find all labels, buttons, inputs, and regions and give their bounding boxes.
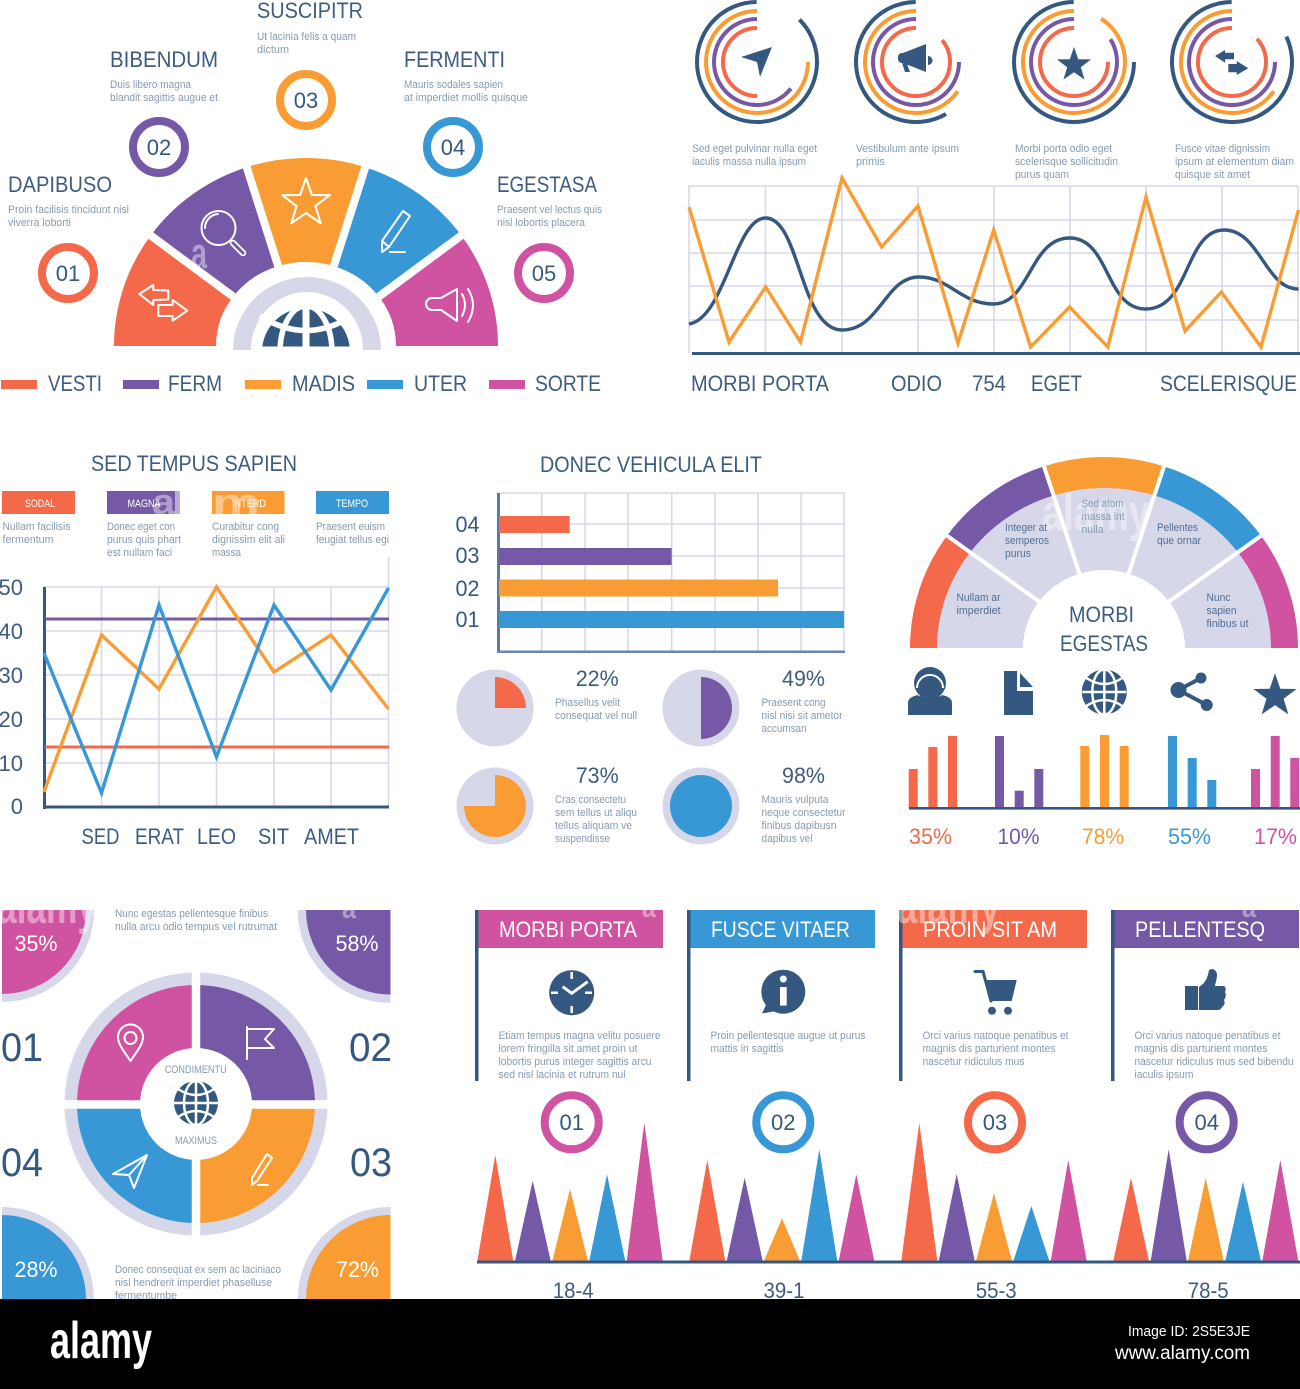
legend: VESTI xyxy=(48,371,102,396)
card 1: MORBI PORTA xyxy=(499,917,637,942)
icon: speaker xyxy=(426,289,473,322)
icon: thumbs up xyxy=(1185,969,1226,1010)
semicircle gauge xyxy=(910,457,1298,650)
line chart xyxy=(689,178,1300,355)
card 4: magnis dis parturient montes xyxy=(1134,1043,1268,1055)
column: sodal xyxy=(2,491,75,546)
column: tempo: feugiat tellus egi xyxy=(316,534,389,546)
center labels and globe: CONDIMENTU xyxy=(165,1064,227,1076)
caption 2: Vestibulum ante ipsum xyxy=(856,143,959,155)
navy curve xyxy=(689,218,1298,330)
corner: 35%: 35% xyxy=(14,931,58,956)
corner: 72%: 72% xyxy=(336,1257,379,1282)
card 3: Orci varius natoque penatibus et xyxy=(922,1030,1068,1042)
legend: SORTE xyxy=(535,371,601,396)
gauge labels: Nunc xyxy=(1206,592,1231,604)
column: magna: est nullam faci xyxy=(107,547,172,559)
text block: Bibendum: Duis libero magna xyxy=(110,79,192,91)
gauge center title: MORBI xyxy=(1069,602,1134,627)
column: interd xyxy=(212,481,285,559)
x axis labels: MORBI PORTA xyxy=(691,371,829,396)
gauge center title xyxy=(1060,602,1148,656)
text block: Dapibuso: DAPIBUSO xyxy=(8,172,112,197)
corner: 28% xyxy=(2,1207,94,1299)
x axis labels: ERAT xyxy=(135,824,184,849)
caption 3: purus quam xyxy=(1015,169,1069,181)
pie 22% xyxy=(456,666,637,746)
icon: navigation arrow xyxy=(741,47,772,77)
triangle chart group 4 xyxy=(1113,1149,1298,1261)
numbered ring 04 xyxy=(427,121,479,173)
x axis labels: 754 xyxy=(972,371,1006,396)
text block: Egestasa: EGESTASA xyxy=(497,172,597,197)
caption 4: ipsum at elementum diam xyxy=(1175,156,1294,168)
percent labels: 78% xyxy=(1082,824,1124,849)
bar labels: 01 xyxy=(456,607,480,632)
bar labels: 02 xyxy=(456,576,480,601)
pie 73%: Cras consectetu xyxy=(555,794,626,806)
pie 22%: 22% xyxy=(576,666,619,691)
icon: globe xyxy=(258,309,350,346)
semicircle segment: magenta xyxy=(379,236,498,346)
icon: flag xyxy=(247,1027,274,1059)
numbered ring 05: 05 xyxy=(532,261,556,286)
column: tempo: Praesent euism xyxy=(316,521,385,533)
icon: pencil xyxy=(252,1154,272,1185)
footer url: www.alamy.com xyxy=(1114,1343,1250,1364)
semicircle gauge: alamy xyxy=(1042,484,1150,542)
caption 4: Fusce vitae dignissim xyxy=(1175,143,1270,155)
pie 49%: Praesent cong xyxy=(762,697,826,709)
range labels: 39-1 xyxy=(764,1278,804,1303)
card 2: Proin pellentesque augue ut purus xyxy=(710,1030,866,1042)
footer logo: alamy xyxy=(50,1312,152,1370)
quadrant numbers: 04 xyxy=(1,1141,43,1185)
top note xyxy=(115,908,277,933)
wheel xyxy=(62,970,330,1238)
text block: Suscipitr xyxy=(257,0,363,56)
card 4: PELLENTESQ xyxy=(1135,917,1265,942)
radial chart 4 xyxy=(1152,0,1300,142)
text block: Suscipitr: dictum xyxy=(257,44,289,56)
gauge labels: Integer at xyxy=(1005,522,1047,534)
text block: Dapibuso: Proin facilisis tincidunt nisl xyxy=(8,204,129,216)
card 3: magnis dis parturient montes xyxy=(922,1043,1056,1055)
column: sodal: SODAL xyxy=(25,498,55,510)
legend: FERM xyxy=(168,371,222,396)
bottom note: Donec consequat ex sem ac laciniaco xyxy=(115,1264,281,1276)
numbered ring 02 xyxy=(133,121,185,173)
semicircle segment: orange xyxy=(247,158,365,266)
caption 2 xyxy=(856,143,959,168)
caption 1 xyxy=(692,143,817,168)
column: magna: a xyxy=(152,481,176,522)
numbered ring 01 xyxy=(545,1095,599,1149)
gauge labels: purus xyxy=(1005,548,1031,560)
caption 3 xyxy=(1015,143,1118,181)
column: tempo xyxy=(316,491,389,546)
card 1: Etiam tempus magna velitu posuere xyxy=(498,1030,660,1042)
icon: star outline xyxy=(282,178,330,223)
pie 49%: accumsan xyxy=(762,723,806,735)
range labels xyxy=(553,1278,1229,1303)
numbered ring 04: 04 xyxy=(1194,1110,1219,1135)
percent labels: 35% xyxy=(909,824,952,849)
pie 22%: consequat vel null xyxy=(555,710,637,722)
caption 4: quisque sit amet xyxy=(1175,169,1250,181)
gauge labels: semperos xyxy=(1005,535,1049,547)
corner: 58% xyxy=(298,910,390,1003)
column: magna: Donec eget con xyxy=(107,521,175,533)
numbered ring 02: 02 xyxy=(771,1110,796,1135)
triangle chart axis xyxy=(477,1260,1300,1264)
x axis labels: AMET xyxy=(304,824,359,849)
card 1: lorem fringilla sit amet proin ut xyxy=(498,1043,638,1055)
x axis labels: SIT xyxy=(258,824,289,849)
quadrant numbers xyxy=(1,1026,392,1185)
text block: Fermenti: FERMENTI xyxy=(404,47,505,72)
column: magna: purus quis phart xyxy=(107,534,181,546)
column: sodal: fermentum xyxy=(2,534,54,546)
lavender arch xyxy=(233,277,381,350)
icon: magnifier xyxy=(202,211,243,253)
numbered ring 03 xyxy=(968,1095,1022,1149)
pie 73%: suspendisse xyxy=(555,833,610,845)
text block: Dapibuso xyxy=(8,172,129,229)
text block: Suscipitr: Ut lacinia felis a quam xyxy=(257,31,356,43)
icon: globe xyxy=(1082,670,1127,714)
panel: donec vehicula elit xyxy=(456,452,846,845)
pie 98%: finibus dapibusn xyxy=(762,820,836,832)
text block: Egestasa xyxy=(497,172,602,229)
footer image id: Image ID: 2S5E3JE xyxy=(1128,1323,1250,1340)
x axis labels xyxy=(82,824,359,849)
percent labels: 10% xyxy=(998,824,1040,849)
numbered ring 01: 01 xyxy=(56,261,80,286)
icon: exchange arrows xyxy=(139,285,187,321)
icon: info bubble xyxy=(761,970,805,1014)
semicircle segment: purple xyxy=(151,167,278,297)
corner: 58%: 58% xyxy=(336,931,378,956)
caption 3: Morbi porta odio eget xyxy=(1015,143,1112,155)
icon: paper plane xyxy=(113,1155,147,1188)
quadrant numbers: 01 xyxy=(1,1026,43,1070)
numbered ring 01 xyxy=(42,247,94,299)
column: tempo: TEMPO xyxy=(336,498,368,510)
gauge labels: nulla xyxy=(1082,524,1104,536)
text block: Egestasa: Praesent vel lectus quis xyxy=(497,204,602,216)
horizontal bar chart xyxy=(497,493,845,653)
column: interd: INTERD xyxy=(232,498,266,510)
range labels: 55-3 xyxy=(976,1278,1017,1303)
radial chart 3 xyxy=(1004,0,1144,132)
pie 98%: dapibus vel xyxy=(762,833,812,845)
corner: 28%: 28% xyxy=(14,1257,58,1282)
column: magna: MAGNA xyxy=(128,498,161,510)
pie 73%: sem tellus ut aliqu xyxy=(555,807,637,819)
gauge labels: sapien xyxy=(1206,605,1236,617)
column: magna xyxy=(107,481,181,559)
gauge labels xyxy=(956,498,1248,630)
pie 49%: 49% xyxy=(782,666,825,691)
bar chart xyxy=(909,735,1300,810)
card 1: a xyxy=(642,891,656,924)
pie 49% xyxy=(662,666,843,746)
corner: 35%: alamy xyxy=(0,877,97,935)
pie 98%: Mauris vulputa xyxy=(762,794,829,806)
pie 98% xyxy=(662,763,846,845)
y axis labels: 0 xyxy=(11,794,23,819)
semicircle segment: blue xyxy=(334,167,461,297)
caption 2: primis xyxy=(856,156,885,168)
icon: share xyxy=(1170,672,1213,711)
top note: Nunc egestas pellentesque finibus xyxy=(115,908,268,920)
icon: shopping cart xyxy=(975,972,1017,1015)
heading: DONEC VEHICULA ELIT xyxy=(540,452,762,477)
pie 49%: nisl nisi sit ametor xyxy=(762,710,843,722)
card 3: PROIN SIT AM xyxy=(923,917,1057,942)
caption 4 xyxy=(1175,143,1294,181)
gauge labels: Nullam ar xyxy=(956,592,1001,604)
text block: Fermenti: Mauris sodales sapien xyxy=(404,79,503,91)
card 1: sed nisl lacinia et rutrum nul xyxy=(498,1069,626,1081)
panel: radial charts and line chart xyxy=(672,0,1300,396)
caption 1: Sed eget pulvinar nulla eget xyxy=(692,143,817,155)
percent labels: 17% xyxy=(1254,824,1297,849)
footer bar xyxy=(0,1299,1300,1389)
legend xyxy=(1,371,601,396)
panel: sed tempus sapien xyxy=(0,451,389,849)
x axis labels: SED xyxy=(82,824,120,849)
card 4: a xyxy=(1242,891,1256,924)
icon: megaphone xyxy=(898,44,932,72)
text block: Fermenti: at imperdiet mollis quisque xyxy=(404,92,528,104)
numbered ring 05 xyxy=(518,247,570,299)
icon: map pin xyxy=(118,1024,143,1061)
panel: morbi egestas xyxy=(908,457,1300,849)
panel: semicircle process diagram xyxy=(1,0,602,398)
pie 22%: Phasellus velit xyxy=(555,697,620,709)
watermark fragment on purple segment: a xyxy=(191,229,207,278)
icon: headset person xyxy=(908,667,952,715)
numbered ring 02: 02 xyxy=(147,135,171,160)
triangle chart group 2 xyxy=(689,1149,874,1261)
corner: 72% xyxy=(298,1207,390,1299)
card 2 xyxy=(687,910,875,1081)
text block: Bibendum: BIBENDUM xyxy=(110,47,218,72)
numbered ring 02 xyxy=(756,1095,810,1149)
range labels: 78-5 xyxy=(1188,1278,1229,1303)
gauge center title: EGESTAS xyxy=(1060,631,1148,656)
card 3: alamy xyxy=(897,877,1000,935)
triangle chart group 3 xyxy=(901,1123,1087,1261)
quadrant numbers: 02 xyxy=(349,1026,392,1070)
caption 3: scelerisque sollicitudin xyxy=(1015,156,1118,168)
caption 1: iaculis massa nulla ipsum xyxy=(692,156,806,168)
bar labels: 04 xyxy=(456,512,480,537)
center labels and globe: MAXIMUS xyxy=(175,1135,217,1147)
bottom note: nisl hendrerit imperdiet phaselluse xyxy=(115,1277,272,1289)
card 3: nascetur ridiculus mus xyxy=(922,1056,1025,1068)
semicircle segment: coral xyxy=(114,236,233,346)
quadrant numbers: 03 xyxy=(350,1141,392,1185)
card 2: mattis in sagittis xyxy=(710,1043,784,1055)
column: sodal: Nullam facilisis xyxy=(2,521,71,533)
orange zigzag line xyxy=(689,178,1298,347)
numbered ring 03: 03 xyxy=(294,88,318,113)
pie 73% xyxy=(456,763,637,845)
icon: document xyxy=(1004,671,1033,715)
card 3 xyxy=(897,877,1087,1081)
numbered ring 03: 03 xyxy=(983,1110,1007,1135)
numbered ring 01: 01 xyxy=(559,1110,584,1135)
panel: four cards with triangles xyxy=(475,877,1300,1303)
bottom note xyxy=(115,1264,281,1302)
heading: SED TEMPUS SAPIEN xyxy=(91,451,297,476)
legend: UTER xyxy=(414,371,467,396)
card 4 xyxy=(1111,891,1299,1081)
numbered ring 03 xyxy=(280,74,332,126)
numbered ring 04 xyxy=(1180,1095,1234,1149)
bar labels: 03 xyxy=(456,543,480,568)
legend: MADIS xyxy=(292,371,355,396)
gauge labels: imperdiet xyxy=(956,605,1000,617)
icon: clock xyxy=(549,970,594,1015)
column: interd: m xyxy=(212,481,260,522)
column: interd: dignissim elit ali xyxy=(212,534,285,546)
text block: Bibendum xyxy=(110,47,218,104)
gauge labels: Sed atom xyxy=(1082,498,1124,510)
pie 73%: tellus aliquam ve xyxy=(555,820,632,832)
center labels and globe xyxy=(165,1064,227,1147)
gauge labels: massa int xyxy=(1082,511,1124,523)
x axis labels: EGET xyxy=(1031,371,1082,396)
text block: Egestasa: nisl lobortis placera xyxy=(497,217,586,229)
gauge labels: que ornar xyxy=(1157,535,1201,547)
percent labels: 55% xyxy=(1168,824,1211,849)
radial chart 1 xyxy=(672,0,842,147)
gauge labels: finibus ut xyxy=(1206,618,1248,630)
range labels: 18-4 xyxy=(553,1278,594,1303)
bar labels xyxy=(456,512,480,632)
bottom note: fermentumbe xyxy=(115,1290,177,1302)
text block: Fermenti xyxy=(404,47,528,104)
text block: Dapibuso: viverra loborti xyxy=(8,217,71,229)
icon: pencil xyxy=(382,211,410,252)
numbered ring 04: 04 xyxy=(441,135,465,160)
x axis labels: LEO xyxy=(197,824,236,849)
card 2: FUSCE VITAER xyxy=(711,917,850,942)
icon: exchange arrows solid xyxy=(1215,50,1248,75)
x axis labels xyxy=(691,371,1297,396)
card 4: Orci varius natoque penatibus et xyxy=(1134,1030,1280,1042)
pie 73%: 73% xyxy=(576,763,619,788)
corner: 35% xyxy=(2,910,94,1002)
gauge labels: Pellentes xyxy=(1157,522,1198,534)
y axis labels xyxy=(0,575,23,819)
icon: star xyxy=(1057,47,1091,80)
column: interd: massa xyxy=(212,547,242,559)
radial chart 2 xyxy=(834,0,998,144)
triangle chart group 1 xyxy=(477,1123,663,1261)
corner: 58%: a xyxy=(342,892,356,925)
percent labels xyxy=(909,824,1297,849)
pie 98%: 98% xyxy=(782,763,825,788)
card 1: lobortis purus integer sagittis arcu xyxy=(498,1056,652,1068)
card 1 xyxy=(475,891,663,1081)
column: interd: Curabitur cong xyxy=(212,521,279,533)
icon: star xyxy=(1253,673,1297,714)
top note: nulla arcu odio tempus vel rutrumat xyxy=(115,921,277,933)
x axis labels: ODIO xyxy=(891,371,942,396)
pie 98%: neque consectetur xyxy=(762,807,846,819)
line chart xyxy=(43,557,389,809)
text block: Bibendum: blandit sagittis augue et xyxy=(110,92,218,104)
card 4: iaculis ipsum xyxy=(1134,1069,1194,1081)
panel: quadrant wheel xyxy=(0,877,392,1302)
